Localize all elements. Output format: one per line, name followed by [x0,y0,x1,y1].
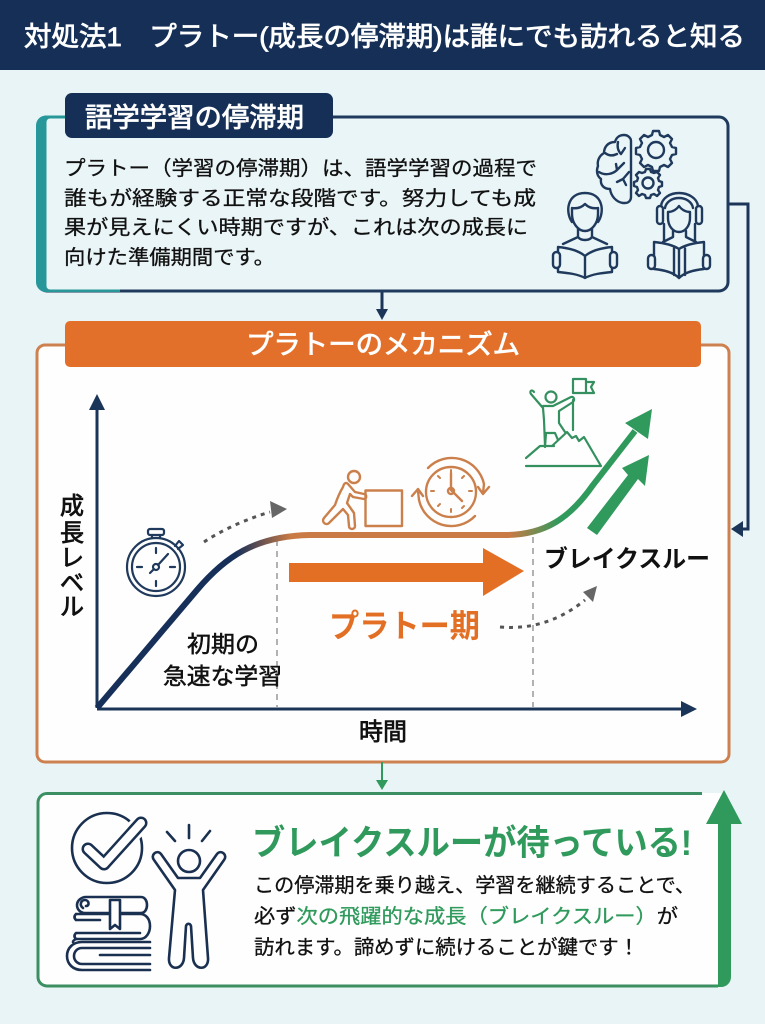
y axis label [60,493,84,621]
y axis label: レ [60,545,84,572]
connector: side return arrow [729,204,748,537]
icon: check circle [72,813,142,883]
early learning label: 急速な学習 [163,663,282,689]
icon: stacked books [67,897,150,970]
y axis label: ベ [60,570,84,597]
result body text: この停滞期を乗り越え、学習を継続することで、 [254,874,695,897]
plateau label: プラトー期 [329,608,480,644]
panel: breakthrough awaits [37,790,742,987]
body text [64,157,537,269]
body text: プラトー（学習の停滞期）は、語学学習の過程で [64,157,537,180]
connector: panel to mechanism [376,292,388,320]
big green arrow [706,790,742,987]
header bar [0,0,765,70]
icon: student with headset [648,193,710,278]
y axis label: 長 [60,520,84,547]
result body text: 必ず次の飛躍的な成長（ブレイクスルー） が [254,904,678,928]
header bar: 対処法1 プラトー(成長の停滞期)は誰にでも訪れると知る [24,22,745,52]
icon: climber with flag [526,379,601,466]
dotted arrow: to breakthrough [500,586,597,627]
breakthrough label: ブレイクスルー [544,545,710,573]
icon: clock with cycle arrows [412,458,489,526]
early learning label [163,631,282,689]
growth curve [97,431,635,708]
body text: 誰もが経験する正常な段階です。努力しても成 [64,187,536,210]
panel: plateau mechanism [37,321,729,762]
body text: 果が見えにくい時期ですが、これは次の成長に [64,216,528,239]
x axis label: 時間 [359,719,407,746]
body text: 向けた準備期間です。 [64,246,275,269]
mechanism heading: プラトーのメカニズム [246,330,520,360]
x axis [97,701,697,717]
y axis [89,394,105,708]
panel tag [65,93,333,138]
icon: person pushing box [323,471,402,529]
y axis label: 成 [60,493,84,520]
result body text: 訪れます。諦めずに続けることが鍵です！ [254,936,639,959]
second green arrow [587,455,649,535]
dotted arrow: to plateau [204,501,287,542]
icon: student reading [553,193,617,278]
y axis label: ル [60,594,84,621]
mechanism heading [65,321,701,367]
icon: person arms raised [153,825,225,968]
result body text [254,874,695,959]
plateau arrow [289,548,524,596]
chart: growth curve [60,379,710,746]
panel tag: 語学学習の停滞期 [85,103,304,133]
icon: brain and gears [597,131,676,203]
curve arrowhead [625,409,652,439]
connector: mechanism to result [376,762,388,790]
icon: stopwatch [127,529,185,596]
result heading: ブレイクスルーが待っている! [252,823,692,863]
panel: plateau explanation [36,93,728,292]
early learning label: 初期の [187,631,259,657]
